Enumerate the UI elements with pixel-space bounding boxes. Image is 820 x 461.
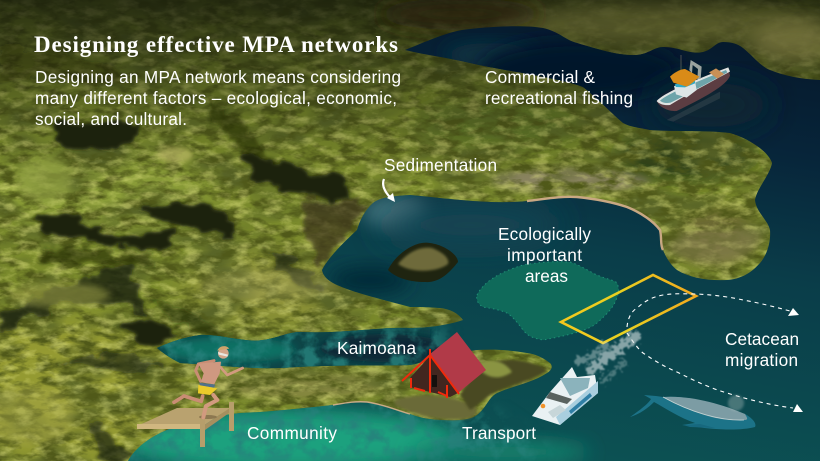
icon: wharenui house — [402, 332, 486, 398]
intro text: many different factors – ecological, economic, — [35, 88, 397, 108]
intro text: social, and cultural. — [35, 109, 187, 129]
arrow: lower cetacean migration route — [627, 333, 803, 412]
barge boards — [402, 349, 459, 398]
icon: running person — [174, 346, 243, 417]
label: commercial and recreational fishing: Commercial & — [485, 67, 596, 87]
roof — [430, 332, 486, 393]
front wall — [410, 356, 458, 397]
island: central bay — [388, 243, 458, 282]
label: ecologically important areas — [498, 224, 591, 286]
title: Designing effective MPA networks — [34, 32, 398, 57]
label: sedimentation: Sedimentation — [384, 155, 497, 175]
icon: ferry — [532, 367, 598, 425]
terrain shadows — [0, 49, 365, 461]
proposed MPA outline — [561, 275, 696, 343]
label: ecologically important areas: important — [507, 245, 582, 265]
label: ecologically important areas: areas — [525, 266, 568, 286]
beach: lower shore — [333, 402, 410, 414]
water: connected bays, channel and open sea — [128, 26, 820, 461]
icon: fishing boat — [657, 55, 730, 122]
doorway — [432, 375, 437, 387]
arrowhead: sedimentation — [387, 193, 395, 202]
lit slopes — [0, 147, 340, 445]
icon: dock — [137, 402, 234, 447]
label: cetacean migration: Cetacean — [725, 329, 799, 349]
intro text: Designing an MPA network means considering — [35, 67, 401, 87]
label: commercial and recreational fishing: recreational fishing — [485, 88, 633, 108]
label: cetacean migration — [725, 329, 799, 370]
ecologically important area — [477, 262, 619, 340]
intro text — [35, 67, 401, 129]
illustration: ferry wake — [578, 336, 636, 382]
arrow: sedimentation — [383, 179, 393, 200]
headland: right side lit patch — [665, 229, 762, 264]
arrow: upper cetacean migration route — [627, 294, 799, 327]
beach: upper bay — [527, 197, 663, 250]
island: peninsula under the house — [395, 360, 547, 419]
label: commercial and recreational fishing — [485, 67, 633, 108]
label: kaimoana: Kaimoana — [337, 338, 416, 358]
label: cetacean migration: migration — [725, 350, 798, 370]
label: ecologically important areas: Ecologically — [498, 224, 591, 244]
label: community: Community — [247, 423, 337, 443]
icon: whale — [630, 395, 755, 430]
label: transport: Transport — [462, 423, 536, 443]
